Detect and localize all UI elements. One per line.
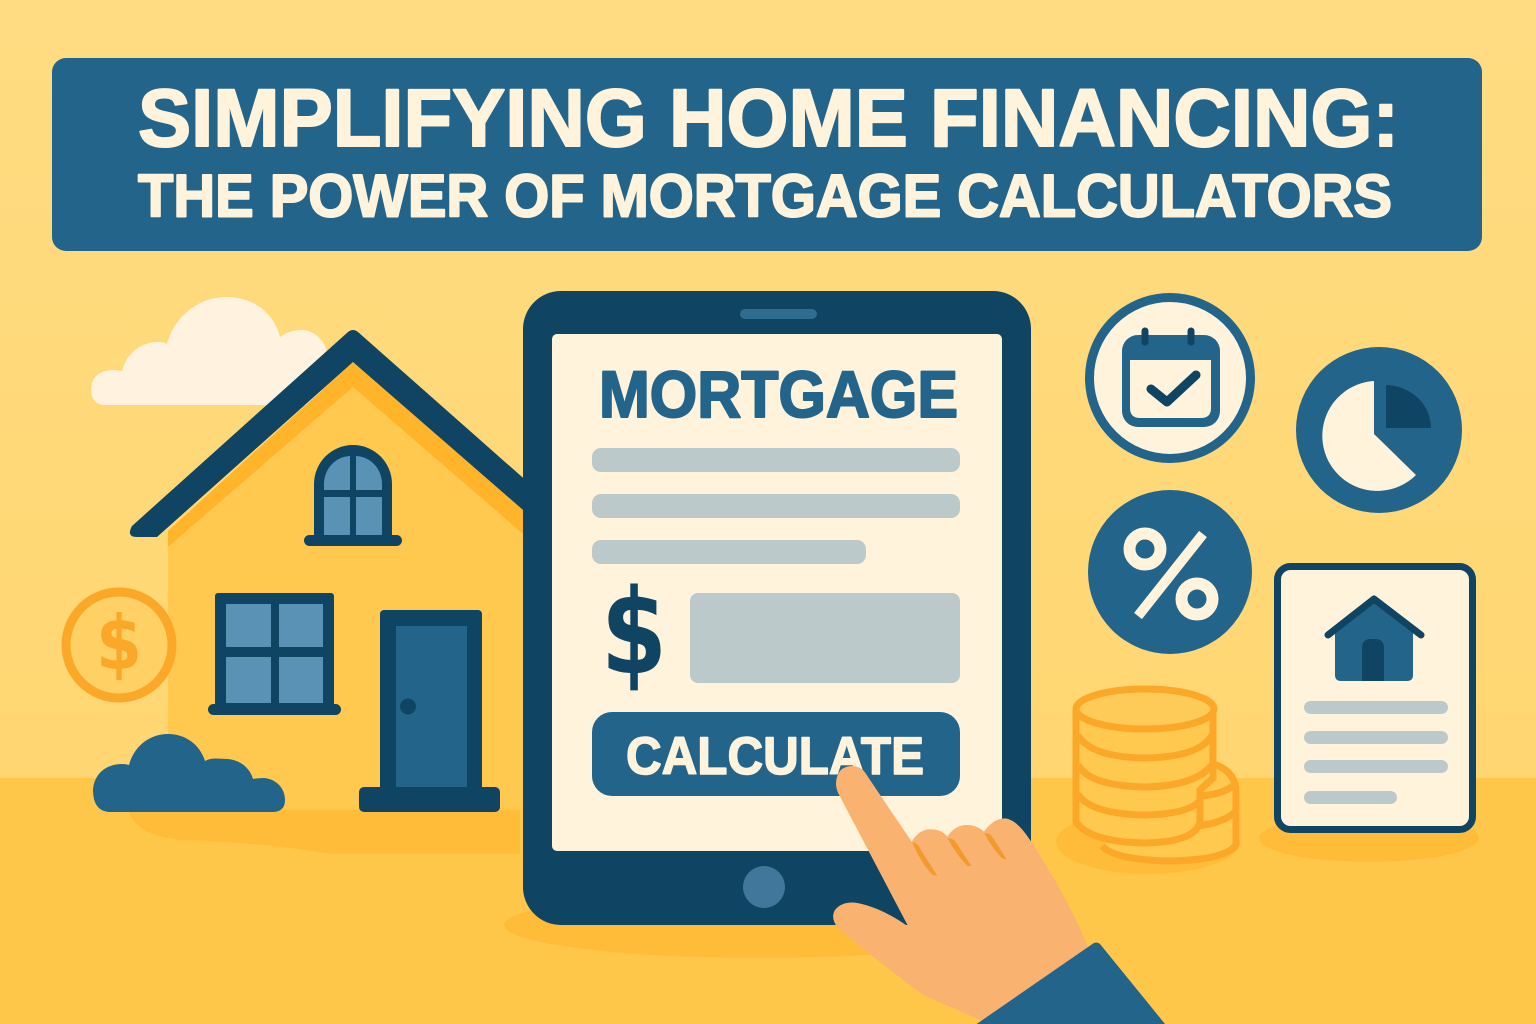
background sky [0, 0, 1536, 780]
icon: pie chart [1296, 347, 1462, 513]
icon: dollar coin [66, 592, 172, 698]
icon: percent [1088, 490, 1252, 654]
icon: coin stacks [1076, 689, 1236, 861]
form field 2 [592, 494, 960, 518]
roof underside band [168, 362, 530, 547]
icon: calendar [1090, 298, 1250, 458]
form field 3 [592, 540, 866, 564]
calculate button [592, 712, 960, 796]
ground shadows [128, 810, 1479, 958]
house wall [168, 387, 530, 808]
document line 3 [1304, 760, 1448, 773]
small house [1328, 599, 1421, 681]
hand pressing button [833, 766, 1165, 1024]
door [359, 610, 500, 812]
finger creases [912, 833, 1007, 876]
cloud [91, 297, 327, 405]
bush [93, 734, 285, 812]
tablet [523, 291, 1031, 925]
icon: home document [1278, 566, 1472, 830]
home button [743, 866, 785, 908]
document line 4 [1304, 791, 1397, 804]
title banner [52, 58, 1482, 251]
roof [130, 330, 530, 537]
document line 1 [1304, 701, 1448, 714]
large window [208, 593, 341, 715]
form field 1 [592, 448, 960, 472]
tablet speaker [740, 309, 817, 319]
sleeve [977, 942, 1165, 1024]
ground [0, 778, 1536, 1024]
icon: dollar coin: $ [96, 599, 142, 687]
title line 2: THE POWER OF MORTGAGE CALCULATORS [138, 162, 1392, 230]
arched window [304, 445, 402, 546]
tablet screen [552, 334, 1002, 851]
title line 1: SIMPLIFYING HOME FINANCING: [138, 73, 1399, 164]
document line 2 [1304, 731, 1448, 744]
calculate button: CALCULATE [626, 727, 924, 786]
hand [833, 766, 1107, 1020]
dollar symbol: $ [601, 563, 667, 701]
heading: mortgage: MORTGAGE [599, 357, 958, 431]
amount field [690, 593, 960, 683]
house [130, 330, 530, 812]
